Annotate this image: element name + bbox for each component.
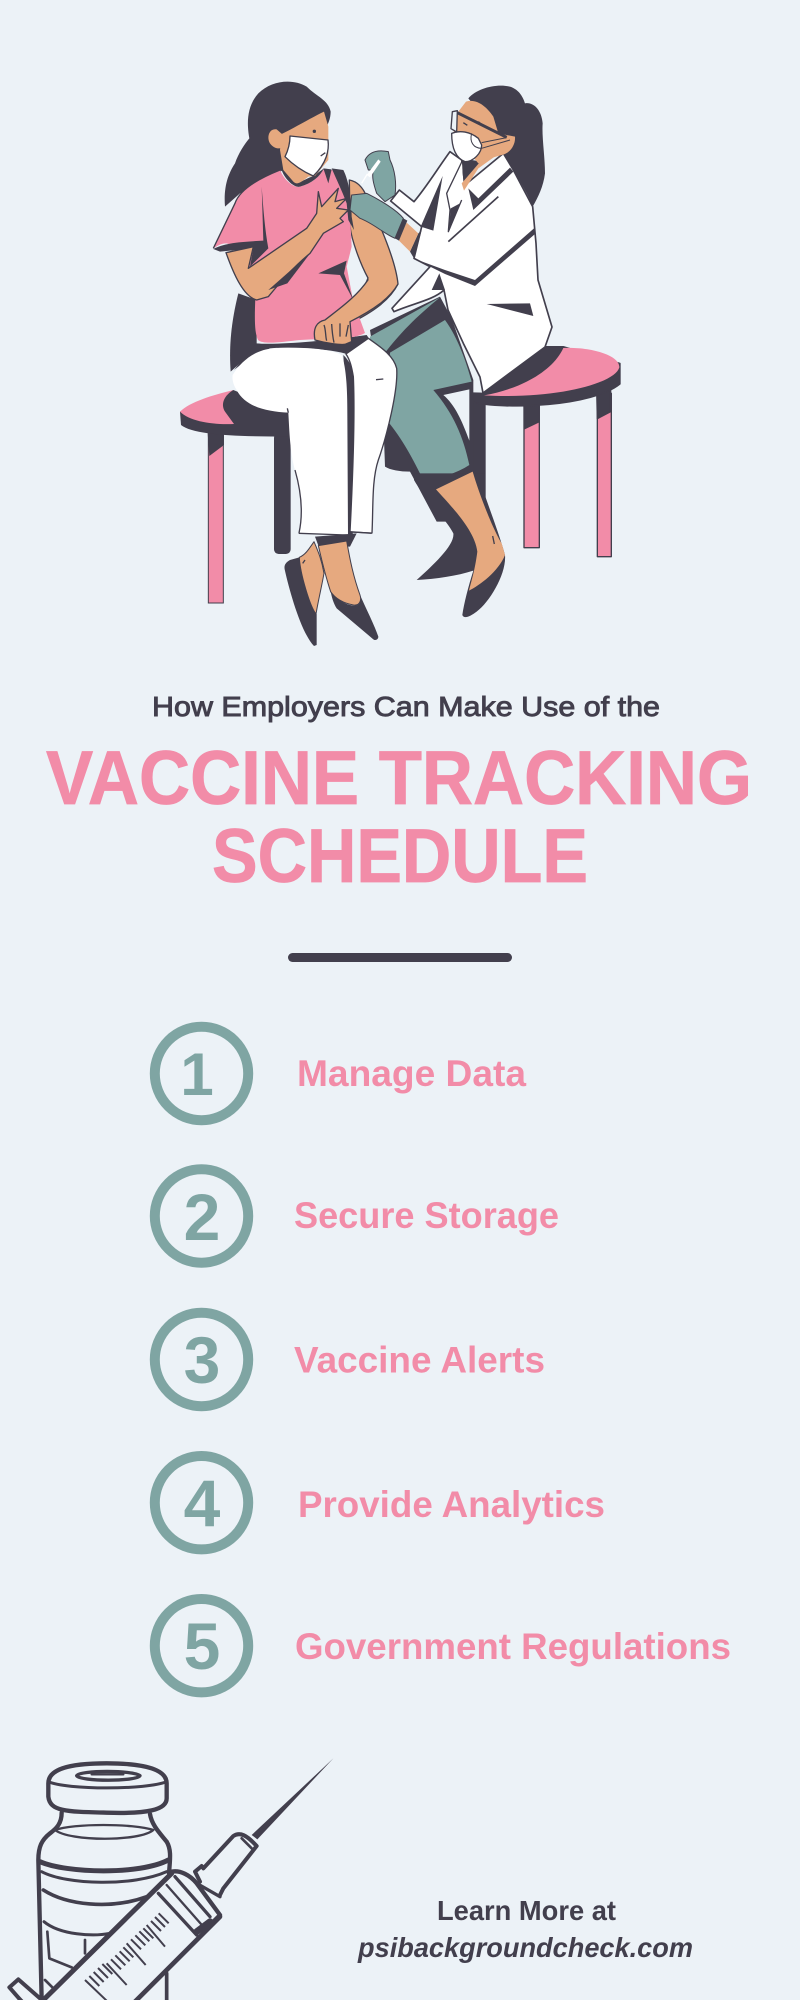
number badge 4: 4 xyxy=(184,1466,221,1540)
left stool xyxy=(180,390,291,603)
woman: shirt, face, mask and arms xyxy=(213,112,398,344)
doctor: gloved hands holding the syringe xyxy=(350,151,418,252)
list item 5 xyxy=(155,1599,731,1692)
doctor: lab coat, face and hair xyxy=(391,86,552,393)
title line 2: SCHEDULE xyxy=(212,814,588,899)
woman: feet and shoes xyxy=(284,532,378,646)
doctor: trousers and lower leg xyxy=(370,297,505,617)
label 2: Secure Storage xyxy=(294,1195,559,1236)
list item 1 xyxy=(155,1027,526,1120)
label 5: Government Regulations xyxy=(295,1626,731,1667)
number badge 5: 5 xyxy=(184,1609,220,1683)
footer: learn more: Learn More at xyxy=(437,1895,616,1926)
subtitle: How Employers Can Make Use of the xyxy=(152,691,660,722)
woman: white trousers xyxy=(232,335,397,537)
woman: hair, back and torso xyxy=(225,82,331,372)
number badge 5 xyxy=(155,1599,248,1692)
label 4: Provide Analytics xyxy=(298,1484,605,1525)
number badge 2: 2 xyxy=(184,1180,220,1254)
list item 3 xyxy=(155,1313,545,1406)
graduation ticks xyxy=(85,1913,169,2000)
number badge 3: 3 xyxy=(184,1323,220,1397)
list item 2 xyxy=(155,1169,559,1263)
number badge 4 xyxy=(155,1456,248,1549)
number badge 1: 1 xyxy=(180,1041,214,1108)
list item 4 xyxy=(155,1456,605,1549)
syringe xyxy=(9,1758,333,2000)
footer: website: psibackgroundcheck.com xyxy=(357,1932,693,1963)
right stool xyxy=(458,347,620,557)
vial xyxy=(38,1763,170,2000)
icon: vaccine vial and syringe xyxy=(9,1758,333,2000)
number badge 1 xyxy=(155,1027,248,1120)
label 3: Vaccine Alerts xyxy=(294,1340,545,1380)
title line 1: VACCINE TRACKING xyxy=(46,736,752,821)
doctor: pocket xyxy=(487,303,533,316)
divider bar xyxy=(288,953,512,962)
label 1: Manage Data xyxy=(297,1053,526,1094)
number badge 2 xyxy=(155,1169,248,1263)
illustration: woman receiving a vaccine from a doctor xyxy=(180,82,620,646)
number badge 3 xyxy=(155,1313,248,1406)
